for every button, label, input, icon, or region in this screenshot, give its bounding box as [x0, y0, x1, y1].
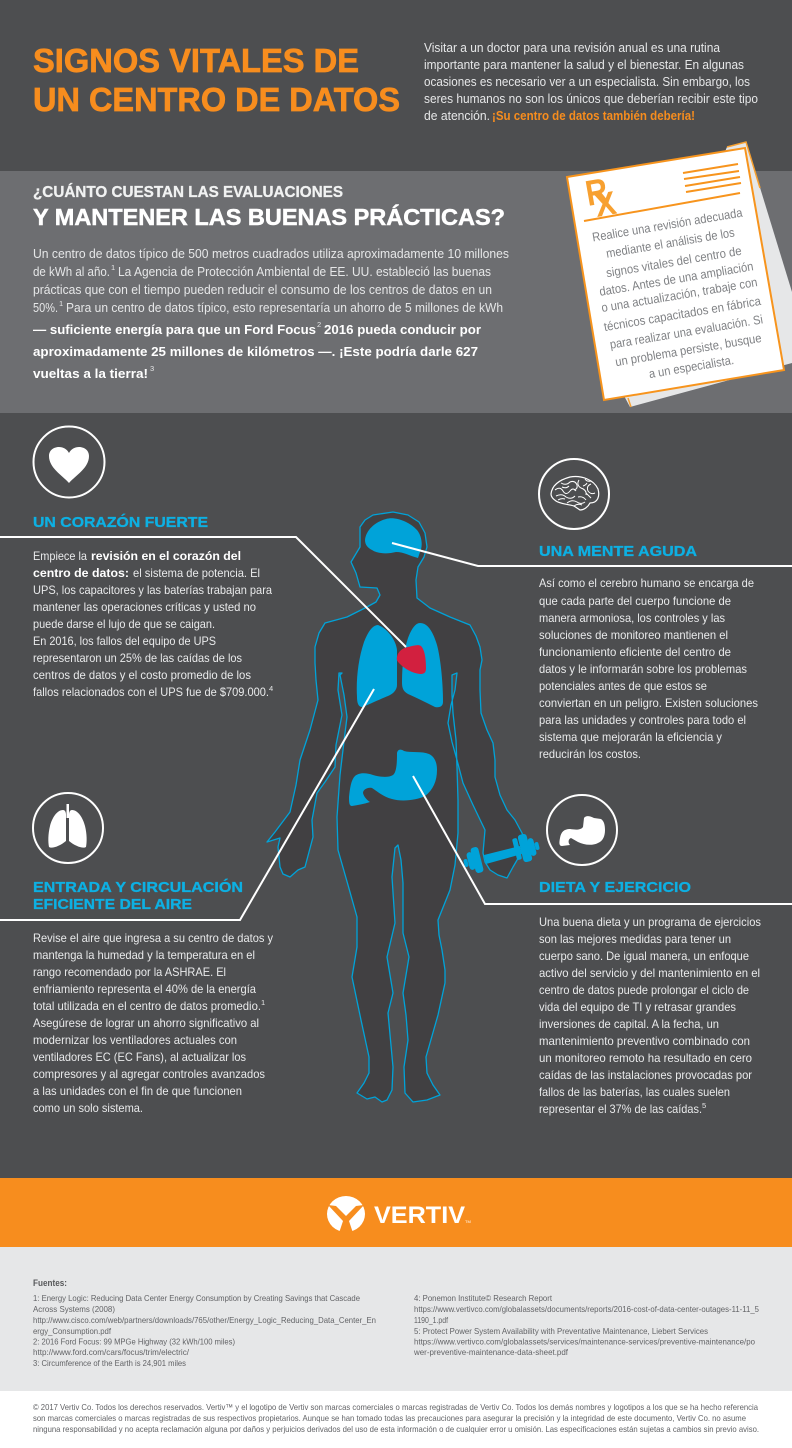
sources right column: 1190_1.pdf — [414, 1315, 449, 1325]
text block: manera armoniosa, los controles y las — [539, 611, 725, 625]
icon: dumbbell — [463, 833, 540, 874]
text block: Así como el cerebro humano se encarga de — [539, 576, 754, 590]
text block — [33, 549, 273, 699]
text block: evaluations: Un centro de datos típico de 500 metros cuadrados utiliza aproximadamente 10 millones — [33, 247, 509, 261]
sources left column: 2: 2016 Ford Focus: 99 MPGe Highway (32 kWh/100 miles) — [33, 1336, 235, 1346]
text block: mantener las operaciones críticas y usted no — [33, 600, 256, 614]
text block: activo del servicio y del mantenimiento en el — [539, 966, 760, 980]
text block: evaluations: 1 — [59, 299, 63, 308]
text block: reducirán los costos. — [539, 747, 641, 761]
prescription note — [567, 142, 792, 407]
text block: a las unidades con el fin de que funcionen — [33, 1084, 242, 1098]
icon: stomach — [547, 795, 617, 865]
note text: Realice una revisión adecuada — [591, 206, 743, 245]
note header lines — [584, 164, 741, 221]
text block: Empiece la — [33, 549, 87, 563]
note text: signos vitales del centro de — [605, 244, 743, 280]
back page — [622, 142, 792, 407]
text block — [539, 576, 758, 761]
text block: representaron un 25% de las caídas de los — [33, 651, 242, 665]
text block: que cada parte del cuerpo funcione de — [539, 594, 731, 608]
sources heading: Fuentes: — [33, 1278, 67, 1288]
text block: datos y le informarán sobre los problemas — [539, 662, 747, 676]
sources right column: 5: Protect Power System Availability with Preventative Maintenance, Liebert Services — [414, 1326, 708, 1336]
organ: heart — [397, 645, 426, 674]
text block: rango recomendado por la ASHRAE. El — [33, 965, 226, 979]
text block: evaluations: 50%. — [33, 301, 58, 315]
text block: ventiladores EC (EC Fans), al actualizar los — [33, 1050, 246, 1064]
title: UN CENTRO DE DATOS — [33, 81, 400, 118]
panel: diet and exercise — [539, 795, 761, 1116]
text block: conviertan en un peligro. Existen soluciones — [539, 696, 758, 710]
panel: efficient air — [33, 793, 273, 1115]
sources left column: http://www.cisco.com/web/partners/downloads/765/other/Energy_Logic_Reducing_Data_Center_En — [33, 1315, 376, 1325]
text block: puede darse el lujo de que se caigan. — [33, 617, 215, 631]
text block: evaluations: 3 — [150, 364, 154, 373]
text block: evaluations — [33, 247, 509, 381]
leader lines — [0, 537, 792, 920]
heading: UNA MENTE AGUDA — [539, 543, 697, 560]
logo: Vertiv — [327, 1196, 471, 1233]
heading: UN CORAZÓN FUERTE — [33, 513, 208, 531]
section heading: evaluations: Y MANTENER LAS BUENAS PRÁCTICAS? — [33, 203, 505, 230]
title — [33, 42, 400, 118]
sources right column: wer-preventive-maintenance-data-sheet.pdf — [413, 1347, 569, 1357]
text block: el sistema de potencia. El — [133, 566, 260, 580]
note text: para realizar una evaluación. Si — [609, 312, 764, 352]
text block: modernizar los ventiladores actuales con — [33, 1033, 237, 1047]
sources left column: ergy_Consumption.pdf — [33, 1326, 112, 1336]
intro text: seres humanos no son los únicos que deberían recibir este tipo — [424, 92, 758, 106]
organ: brain — [365, 518, 422, 558]
front page — [567, 148, 784, 400]
title: SIGNOS VITALES DE — [33, 42, 359, 79]
sources left column: Across Systems (2008) — [33, 1304, 115, 1314]
sources left column: 1: Energy Logic: Reducing Data Center Energy Consumption by Creating Savings that Cascade — [33, 1293, 360, 1303]
text block: como un solo sistema. — [33, 1101, 143, 1115]
text block: soluciones de monitoreo mantienen el — [539, 628, 728, 642]
text block: Revise el aire que ingresa a su centro de datos y — [33, 931, 273, 945]
sources right column — [413, 1293, 759, 1357]
text block: revisión en el corazón del — [91, 549, 241, 563]
human body figure — [267, 512, 540, 1102]
note text: mediante el análisis de los — [605, 225, 736, 261]
panel: sources background — [0, 1247, 792, 1391]
text block: evaluations: La Agencia de Protección Ambiental de EE. UU. estableció las buenas — [118, 265, 491, 279]
text block: para las unidades y controles para todo el — [539, 713, 746, 727]
text block: potenciales antes de que estos se — [539, 679, 707, 693]
text block: centros de datos y el costo promedio de los — [33, 668, 251, 682]
note text — [591, 206, 764, 381]
sources right column: https://www.vertivco.com/globalassets/documents/reports/2016-cost-of-data-center-outages-11-11_5 — [414, 1304, 759, 1314]
panel: orange logo band background — [0, 1178, 792, 1247]
text block: vida del equipo de TI y retrasar grandes — [539, 1000, 736, 1014]
text block — [33, 931, 273, 1115]
note text: un problema persiste, busque — [614, 331, 763, 369]
icon: Vertiv mark — [327, 1196, 365, 1233]
intro text: ¡Su centro de datos también debería! — [492, 109, 695, 123]
heading: EFICIENTE DEL AIRE — [33, 896, 192, 913]
sources left column: 3: Circumference of the Earth is 24,901 miles — [33, 1358, 186, 1368]
text block: 5 — [702, 1101, 706, 1110]
text block: sistema que mejorarán la eficiencia y — [539, 730, 722, 744]
text block: representar el 37% de las caídas. — [539, 1102, 702, 1116]
note text: a un especialista. — [648, 353, 735, 381]
text block: centro de datos puede prolongar el ciclo de — [539, 983, 749, 997]
text block: Una buena dieta y un programa de ejercicios — [539, 915, 761, 929]
panel: cost section background — [0, 171, 792, 413]
intro text: de atención. — [424, 109, 490, 123]
Rx symbol: X — [592, 184, 619, 224]
intro text — [424, 41, 758, 123]
icon: lungs — [33, 793, 103, 863]
text block: son las mejores medidas para tener un — [539, 932, 731, 946]
text block: evaluations: 2 — [317, 320, 321, 329]
text block: cuerpo sano. De igual manera, un enfoque — [539, 949, 749, 963]
panel: header background — [0, 0, 792, 171]
text block: evaluations: de kWh al año. — [33, 265, 110, 279]
text block: mantenimiento preventivo combinado con — [539, 1034, 750, 1048]
text block: evaluations: prácticas que con el tiempo pueden reducir el consumo de los centros de datos en un — [33, 283, 492, 297]
text block: fallos relacionados con el UPS fue de $709.000. — [33, 685, 269, 699]
sources — [33, 1278, 759, 1368]
text block: UPS, los capacitores y las baterías trabajan para — [33, 583, 272, 597]
note text: técnicos capacitados en fábrica — [603, 294, 762, 334]
body silhouette — [267, 512, 525, 1102]
text block: 4 — [269, 684, 273, 693]
text block: funcionamiento eficiente del centro de — [539, 645, 731, 659]
text block: Asegúrese de lograr un ahorro significativo al — [33, 1016, 259, 1030]
panel: body section background — [0, 413, 792, 1178]
text block: evaluations: — suficiente energía para que un Ford Focus — [33, 322, 316, 337]
text block — [539, 915, 761, 1116]
heading: ENTRADA Y CIRCULACIÓN — [33, 878, 243, 896]
text block: evaluations: Para un centro de datos típico, esto representaría un ahorro de 5 millones de kWh — [66, 301, 503, 315]
text block: evaluations: vueltas a la tierra! — [33, 366, 148, 381]
text block: un monitoreo remoto ha resultado en cero — [539, 1051, 752, 1065]
sources left column — [33, 1293, 376, 1368]
text block: caídas de las instalaciones provocadas por — [539, 1068, 752, 1082]
panel: legal background — [0, 1391, 792, 1448]
legal text — [33, 1402, 759, 1434]
text block: mantenga la humedad y la temperatura en el — [33, 948, 255, 962]
text block: evaluations: 1 — [111, 263, 115, 272]
organ: stomach — [349, 750, 437, 806]
heading: DIETA Y EJERCICIO — [539, 879, 691, 896]
organ: left lung — [357, 625, 397, 707]
text block: evaluations: 2016 pueda conducir por — [324, 322, 481, 337]
text block: compresores y al agregar controles avanzados — [33, 1067, 265, 1081]
panel: sharp mind — [539, 459, 758, 761]
intro text: ocasiones es necesario ver a un especialista. Sin embargo, los — [424, 75, 750, 89]
icon: heart — [34, 426, 104, 498]
Rx symbol: R — [582, 170, 611, 214]
section heading: evaluations — [33, 184, 505, 230]
sources right column: 4: Ponemon Institute© Research Report — [414, 1293, 553, 1303]
logo: Vertiv: TM — [465, 1219, 471, 1224]
text block: 1 — [261, 998, 265, 1007]
text block: total utilizada en el centro de datos promedio. — [33, 999, 261, 1013]
section heading: evaluations: ¿CUÁNTO CUESTAN LAS EVALUACIONES — [33, 184, 343, 201]
text block: evaluations: aproximadamente 25 millones de kilómetros —. ¡Este podría darle 627 — [33, 344, 478, 359]
text block: enfriamiento representa el 40% de la energía — [33, 982, 256, 996]
heading — [33, 878, 243, 913]
note text: o una actualización, trabaje con — [600, 275, 758, 315]
note text: datos. Antes de una ampliación — [598, 259, 754, 299]
text block: fallos de las baterías, las cuales suelen — [539, 1085, 730, 1099]
panel: strong heart — [33, 426, 273, 699]
text block: inversiones de capital. A la fecha, un — [539, 1017, 719, 1031]
sources right column: https://www.vertivco.com/globalassets/services/maintenance-services/preventive-maintenance/po — [414, 1336, 755, 1346]
text block: centro de datos: — [33, 566, 129, 580]
intro text: Visitar a un doctor para una revisión anual es una rutina — [424, 41, 720, 55]
organ: right lung — [402, 623, 443, 707]
text block: En 2016, los fallos del equipo de UPS — [33, 634, 216, 648]
intro text: importante para mantener la salud y el bienestar. En algunas — [424, 58, 744, 72]
sources left column: http://www.ford.com/cars/focus/trim/electric/ — [33, 1347, 190, 1357]
wordmark: VERTIV — [374, 1202, 465, 1229]
icon: brain — [539, 459, 609, 529]
